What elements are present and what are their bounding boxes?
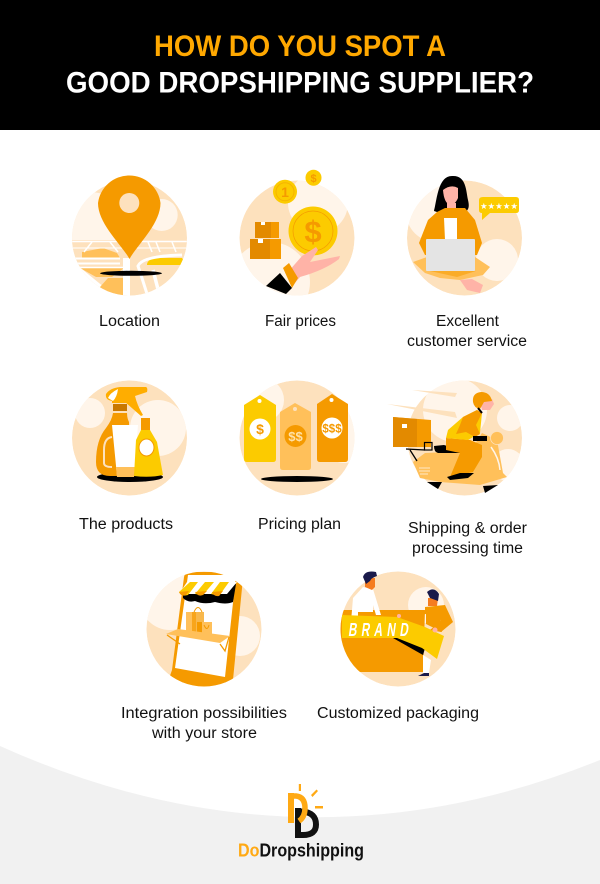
label: integration: Integration possibilities (121, 705, 287, 722)
label: integration: with your store (151, 725, 257, 742)
label: customer service (407, 313, 527, 350)
phone (165, 572, 243, 690)
footer band (0, 746, 600, 884)
tube (112, 425, 138, 477)
label: fair prices: Fair prices (265, 313, 336, 330)
title line 2: GOOD DROPSHIPPING SUPPLIER? (66, 66, 534, 100)
banner: BRAND (347, 620, 414, 641)
shelf (166, 629, 230, 651)
lotion bottle (134, 418, 163, 477)
header (0, 0, 600, 130)
label: the products: The products (79, 516, 173, 533)
small coin: $ (310, 173, 317, 185)
icon: fair prices (240, 170, 354, 296)
boxes (250, 222, 281, 259)
spray bottle (96, 387, 147, 476)
label: shipping: Shipping & order (408, 520, 527, 537)
icon: customer service (406, 176, 522, 296)
label: packaging: Customized packaging (317, 705, 479, 722)
label: customer service: Excellent (436, 313, 500, 330)
awning (179, 582, 237, 604)
man left (351, 572, 381, 627)
icon: integration (140, 570, 262, 690)
tag three: $$$ (322, 424, 342, 436)
scooter (406, 432, 507, 493)
label: location: Location (99, 313, 160, 330)
label: customer service: customer service (407, 333, 527, 350)
tag two: $$ (288, 429, 303, 444)
big coin: $ (304, 214, 322, 249)
man right (397, 589, 453, 676)
big coin (288, 206, 338, 256)
label: shipping (408, 520, 527, 557)
icon: products (72, 380, 187, 496)
coin one: 1 (281, 184, 289, 200)
coin one (273, 180, 297, 204)
logo (238, 784, 364, 860)
small coin (306, 170, 322, 186)
title line 1: HOW DO YOU SPOT A (154, 30, 446, 63)
woman (413, 176, 490, 293)
speech bubble: ★★★★★ (480, 201, 518, 211)
hand (266, 247, 340, 294)
logo wordmark: DoDropshipping (238, 840, 364, 860)
icon: pricing plan (240, 380, 354, 496)
tag one: $ (256, 421, 264, 437)
box (393, 417, 431, 447)
icon: packaging (338, 572, 456, 686)
label: integration (121, 705, 287, 742)
label: pricing plan: Pricing plan (258, 516, 341, 533)
bags (186, 608, 212, 638)
label: shipping: processing time (412, 540, 523, 557)
icon: shipping (387, 378, 524, 496)
rider (446, 392, 494, 480)
speed streaks (387, 390, 457, 418)
logo mark (288, 784, 323, 838)
icon: location (72, 176, 187, 296)
